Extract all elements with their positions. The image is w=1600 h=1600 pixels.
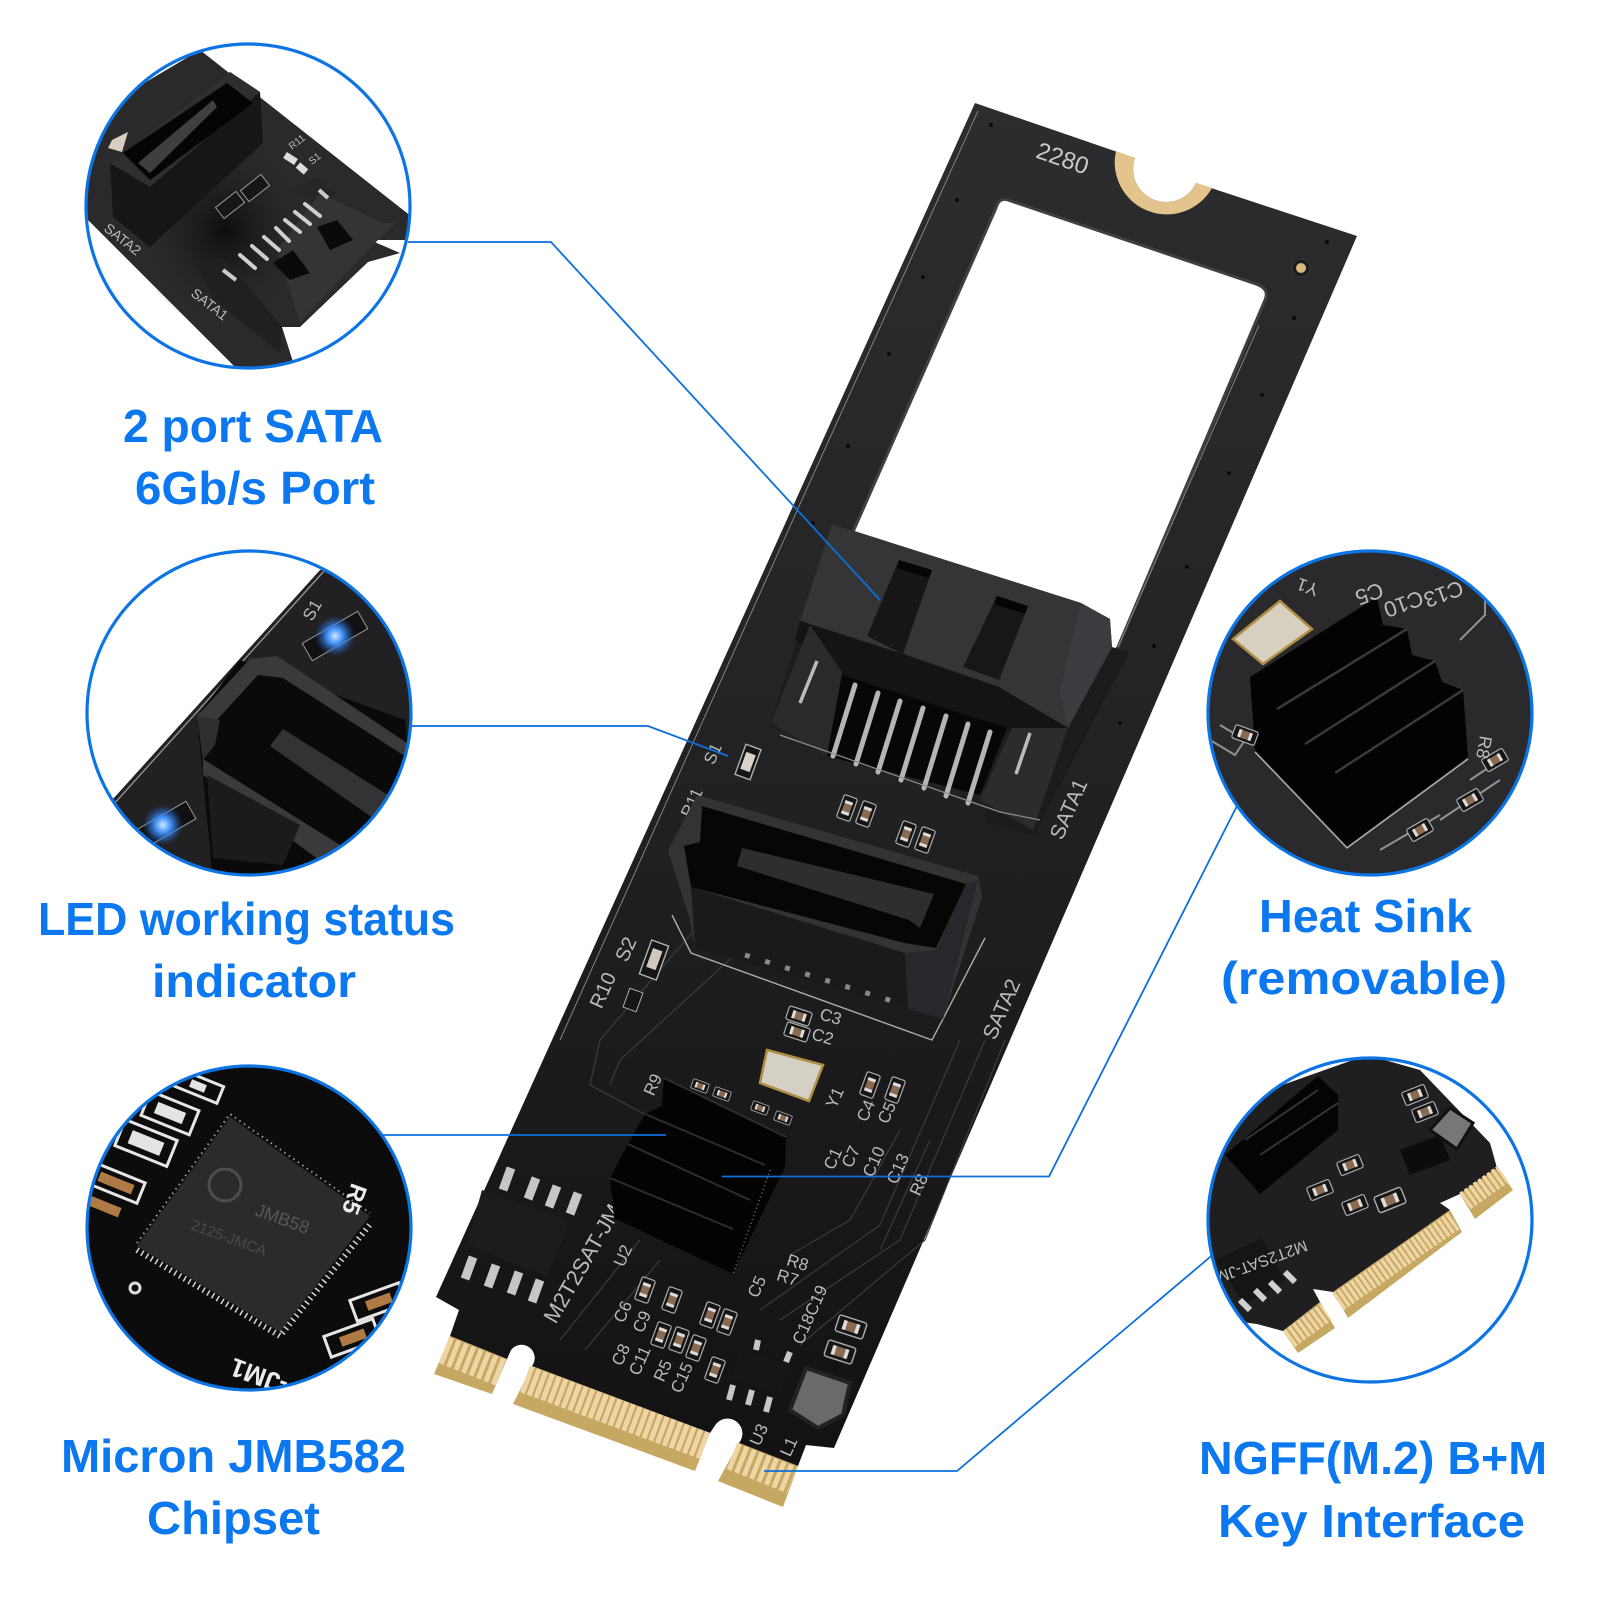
panel: M.2 interface circle: M2T2SAT-JM1 <box>1204 1236 1309 1288</box>
silkscreen labels: Y1 <box>822 1084 848 1111</box>
panel: chipset circle: -JM1 <box>226 1352 292 1401</box>
lower SATA2 connector body <box>110 72 263 247</box>
leader line: LED <box>412 726 728 756</box>
silkscreen labels: R8 <box>784 1250 811 1275</box>
small passive components <box>634 1071 906 1384</box>
panel: SATA ports circle: SATA1 <box>188 285 231 324</box>
silkscreen labels: C4 <box>853 1097 879 1125</box>
panel: chipset circle <box>80 1060 420 1401</box>
label: Heat Sink (removable) <box>1221 890 1507 1004</box>
label: LED working status indicator <box>38 893 455 1007</box>
regulator U3 <box>729 1340 790 1412</box>
mounting pad <box>1292 259 1310 277</box>
gold edge connector <box>434 1336 798 1507</box>
silkscreen label 2280: 2280 <box>1033 137 1092 180</box>
panel: heat sink circle: Y1 <box>1294 574 1321 600</box>
silkscreen labels: C15 <box>667 1360 697 1396</box>
label: Micron JMB582 Chipset: Chipset <box>147 1492 320 1544</box>
panel: heat sink circle: C5 <box>1352 577 1387 610</box>
leader line: chipset <box>382 1134 666 1136</box>
silkscreen labels: SATA1 <box>1046 776 1092 843</box>
silkscreen labels: C13 <box>883 1151 913 1187</box>
caps between connectors <box>215 191 245 219</box>
panel: chipset circle: 2125-JMCA <box>189 1217 269 1260</box>
LED S1 <box>735 744 761 780</box>
SATA1 connector body <box>197 260 280 353</box>
SATA1 right block <box>980 728 1068 830</box>
silkscreen labels: R10 <box>586 969 621 1012</box>
label: NGFF(M.2) B+M Key Interface: NGFF(M.2) B+M <box>1199 1432 1547 1484</box>
silkscreen labels: C6 <box>610 1298 636 1326</box>
ring <box>87 1066 411 1390</box>
silkscreen labels: L1 <box>776 1434 802 1459</box>
label: LED working status indicator: indicator <box>152 955 356 1007</box>
panel: chipset circle: R5 <box>336 1180 372 1218</box>
open window in board frame <box>845 199 1266 665</box>
label: 2 port SATA <box>123 400 383 514</box>
ring <box>1208 1058 1532 1382</box>
leader line: heat sink <box>722 800 1240 1176</box>
silkscreen labels: C5 <box>874 1099 900 1127</box>
silkscreen labels: C2 <box>809 1024 836 1049</box>
footprints near crystal <box>690 1079 793 1125</box>
ring <box>1208 551 1532 875</box>
silkscreen labels: S1 <box>700 740 726 767</box>
SATA1 connector <box>769 524 1129 854</box>
silkscreen labels: C11 <box>625 1343 655 1378</box>
right side passive components <box>324 1283 406 1357</box>
silkscreen labels: U2 <box>610 1242 636 1270</box>
traces <box>1212 600 1500 851</box>
SATA1 left block <box>771 625 842 756</box>
SATA1 pins <box>833 685 990 803</box>
silkscreen labels: R11 <box>677 785 707 820</box>
ring <box>87 551 411 875</box>
silkscreen labels: S2 <box>611 934 642 965</box>
fins <box>1250 597 1468 846</box>
gold notch ring <box>1115 151 1212 214</box>
product: M.2 SATA adapter board <box>434 103 1357 1507</box>
silkscreen labels: C9 <box>629 1308 655 1336</box>
panel: SATA ports circle: R11 <box>287 133 308 152</box>
silkscreen labels: R8 <box>906 1171 932 1199</box>
panel: heat sink circle: R8 <box>1472 734 1496 760</box>
silkscreen labels: C5 <box>744 1273 770 1301</box>
left side passive components <box>84 1069 224 1217</box>
label: Heat Sink (removable): Heat Sink <box>1259 890 1472 942</box>
silkscreen labels: U3 <box>746 1421 772 1449</box>
silkscreen labels: SATA2 <box>979 976 1025 1043</box>
panel: SATA ports circle <box>82 44 412 372</box>
panel: heat sink circle: C13 <box>1420 575 1467 613</box>
board band <box>82 50 412 372</box>
LED S2 <box>623 940 669 1012</box>
panel: SATA ports circle: SATA2 <box>101 220 144 259</box>
frame traces and vias <box>560 111 1329 1350</box>
crystal oscillator <box>760 1050 823 1101</box>
panel: heat sink circle: C10 <box>1380 585 1427 623</box>
label: NGFF(M.2) B+M Key Interface: Key Interface <box>1218 1495 1525 1547</box>
silkscreen labels: R9 <box>640 1071 666 1099</box>
panel: M.2 interface circle <box>1195 1055 1532 1382</box>
label: Micron JMB582 Chipset <box>61 1430 406 1544</box>
silkscreen labels: C10 <box>859 1144 889 1180</box>
SOIC chip <box>465 1168 578 1302</box>
label: Heat Sink (removable): (removable) <box>1221 952 1507 1004</box>
silkscreen labels: C7 <box>838 1143 864 1171</box>
silkscreen labels: R5 <box>650 1357 676 1385</box>
panel: SATA ports circle: S1 <box>307 151 324 167</box>
silkscreen labels: R7 <box>774 1265 801 1290</box>
silkscreen labels: C3 <box>817 1004 844 1029</box>
label: LED working status indicator: LED working status <box>38 893 455 945</box>
SATA2 connector <box>668 795 985 1042</box>
leader line: SATA ports <box>408 242 880 600</box>
silkscreen labels: C1 <box>820 1145 846 1173</box>
panel: heat sink circle <box>1200 540 1540 880</box>
label: NGFF(M.2) B+M Key Interface <box>1199 1432 1547 1547</box>
panel: LED circle: S1 <box>299 596 326 624</box>
panel: chipset circle: JMB58 <box>253 1200 312 1238</box>
silkscreen labels: C18C19 <box>789 1282 831 1347</box>
board outline <box>436 103 1357 1466</box>
heat sink <box>610 1078 786 1274</box>
label: 2 port SATA: 6Gb/s Port <box>135 462 375 514</box>
silkscreen labels <box>538 740 1092 1459</box>
silkscreen labels: C8 <box>608 1341 634 1369</box>
label: 2 port SATA: 2 port SATA <box>123 400 383 452</box>
label: Micron JMB582 Chipset: Micron JMB582 <box>61 1430 406 1482</box>
leader line: M.2 interface <box>764 1252 1216 1471</box>
inductor L1 <box>790 1368 850 1428</box>
panel: LED circle <box>87 551 420 880</box>
ring <box>86 44 410 368</box>
silkscreen labels: M2T2SAT-JM1 <box>538 1189 633 1327</box>
